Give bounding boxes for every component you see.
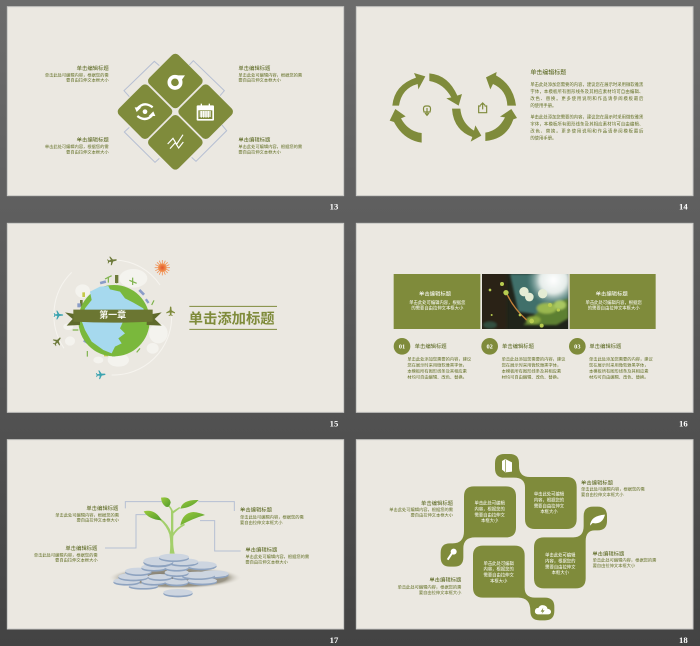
green box right: 单击编辑标题 [596,290,628,298]
item 03: 您在展示时采用微软雅黑字体， [589,361,649,368]
page number 17: 17 [330,635,339,645]
card right with leaf icon: 内容，根据您的 [545,557,576,564]
text: lower left: 单击编辑标题 [77,136,109,144]
text: right [592,550,656,569]
icon: sun [155,260,170,275]
text: lower left: 单击此处可编辑内容，根据您的需 [45,143,109,150]
icon: share [479,103,487,113]
item 02: 02 [487,344,493,351]
icon: plane lower left [51,335,64,348]
card top with book icon: 本框大小 [540,508,558,515]
text: left: 要自由拉伸文本框大小 [410,512,454,519]
icon: sync [135,104,155,119]
text: lower left [45,136,109,155]
text: upper right: 单击编辑标题 [238,64,271,72]
text: upper right [240,506,304,526]
photo: sunlit plants [482,274,568,329]
text: left: 单击此处可编辑内容，根据您的需 [389,506,453,513]
text: upper left: 要自由拉伸文本框大小 [76,517,120,524]
text: lower left: 要自由拉伸文本框大小 [55,557,98,564]
text: upper right: 单击此处可编辑内容，根据您的需 [240,513,304,520]
item 03: 03 [574,344,580,351]
card top with book icon [495,454,577,529]
card right with leaf icon: 需要自由拉伸文 [545,563,576,570]
text block [530,69,644,142]
card left with key icon: 单击此处可编辑 [475,500,505,507]
text: lower left: 要自由拉伸文本框大小 [66,148,109,155]
text: upper right: 单击编辑标题 [581,479,614,487]
text block: 改色、替换。更多使用说明和作品请参阅模板最后 [530,128,644,135]
chapter heading: 单击添加标题 [189,311,275,328]
chapter heading [189,306,277,329]
text: lower right: 单击此处可编辑内容，根据您的需 [238,143,302,150]
text: lower left: 要自由拉伸文本框大小 [419,589,462,596]
text: left: 单击编辑标题 [421,499,454,507]
text: upper right [581,479,645,498]
item 01: 材均可自由编辑、改色、替换。 [407,373,467,380]
card bottom with cloud icon: 内容，根据您的 [484,566,514,573]
icon: download [423,106,431,115]
text: lower left: 单击此处可编辑内容，根据您的需 [398,584,461,591]
text: lower left: 单击此处可编辑内容，根据您的需 [34,551,98,558]
text: upper left: 单击编辑标题 [77,64,109,72]
item 03 [569,338,653,380]
clouds [63,269,168,367]
text: lower left [398,576,462,596]
text: lower right: 要自由拉伸文本框大小 [238,148,282,155]
text: lower right: 要自由拉伸文本框大小 [245,558,289,565]
globe [78,285,150,356]
text: upper left: 单击编辑标题 [86,504,119,512]
text block: 的使用手册。 [530,102,556,109]
panel: slide 15 chapter title [7,223,344,428]
ribbon banner [65,309,162,326]
text: lower right: 单击此处可编辑内容，根据您的需 [245,553,309,560]
item 01: 本模板所有图形线条及其相应素 [407,367,468,374]
icon: plane top [107,256,118,266]
orbit ring [54,260,172,375]
coin shadow [108,566,242,589]
item 01: 单击此处添加您需要的内容，建议 [407,355,472,362]
item 01: 您在展示时采用微软雅黑字体， [407,361,467,368]
card left with key icon: 内容，根据您的 [475,505,505,512]
text: upper left: 单击此处可编辑内容，根据您的需 [45,71,109,78]
text: upper left: 要自由拉伸文本框大小 [66,77,109,84]
text: lower right [238,136,302,155]
item 03: 本模板所有图形线条及其相应素 [589,367,649,374]
text: upper right: 单击此处可编辑内容，根据您的需 [238,71,302,78]
text block: 单击编辑标题 [530,69,566,77]
text block: 字体，本模板所有图形线条及其相应素材均可自由编辑、 [530,88,643,95]
green box right [570,274,656,329]
icon: calendar [197,104,214,121]
page number 18: 18 [679,635,688,645]
text: lower right [245,546,309,565]
green box right: 的需要自由拉伸文本框大小 [588,305,640,312]
text block: 字体，本模板所有图形线条及其相应素材均可自由编辑、 [530,121,643,128]
text: upper right: 要自由拉伸文本框大小 [240,519,283,526]
text: left [389,499,454,519]
card right with leaf icon: 本框大小 [552,569,570,576]
text: upper right [238,64,302,84]
item 02 [481,338,566,380]
card left with key icon: 需要自由拉伸文 [475,512,505,519]
panel: slide 17 plant on coins [7,440,344,645]
green box left: 单击编辑标题 [419,290,452,298]
text: lower right: 单击编辑标题 [245,546,278,554]
card right with leaf icon [534,507,607,588]
item 01: 01 [399,344,405,351]
text block: 单击此处添加您需要的内容，建议您在展示时采用微软雅黑 [530,81,644,88]
card bottom with cloud icon: 本框大小 [490,577,508,584]
item 03: 单击此处添加您需要的内容，建议 [589,355,653,362]
text: upper left [45,64,109,84]
card top with book icon: 需要自由拉伸文 [534,503,565,510]
coin pile [113,554,229,597]
green box right: 单击此处可编辑内容，根据您 [586,299,642,306]
icon: trend lines [168,135,183,149]
card bottom with cloud icon: 需要自由拉伸文 [484,572,514,579]
card left with key icon [441,486,516,567]
item 01 [394,338,472,380]
text block: 改色、替换。更多使用说明和作品请参阅模板最后 [530,95,644,102]
text: upper left: 单击此处可编辑内容，根据您的需 [55,511,119,518]
text: upper right: 单击编辑标题 [240,506,273,514]
green box left: 的需要自由拉伸文本框大小 [411,305,464,312]
item 03: 材均可自由编辑、改色、替换。 [589,373,649,380]
diamond tiles [116,52,235,172]
item 02: 材均可自由编辑、改色、替换。 [502,373,561,380]
card left with key icon: 本框大小 [481,517,499,524]
page number 13: 13 [330,202,339,212]
text: lower left: 单击编辑标题 [65,544,98,552]
item 01: 单击编辑标题 [415,342,447,350]
text: lower right: 单击编辑标题 [238,136,271,144]
card right with leaf icon: 单击此处可编辑 [545,551,576,558]
card top with book icon: 内容，根据您的 [534,496,565,503]
panel: slide 16 three columns with photo [356,223,693,428]
item 02: 本模板所有图形线条及其相应素 [502,367,562,374]
page number 15: 15 [330,418,339,428]
page number 14: 14 [679,202,688,212]
text: upper right: 要自由拉伸文本框大小 [581,491,624,498]
text block: 单击此处添加您需要的内容，建议您在展示时采用微软雅黑 [530,114,644,121]
panel: slide 14 infinity arrows [356,7,693,212]
text: upper right: 单击此处可编辑内容，根据您的需 [581,486,645,493]
item 02: 单击编辑标题 [502,342,535,350]
item 03: 单击编辑标题 [589,342,622,350]
green box left [394,274,480,329]
text: right: 要自由拉伸文本框大小 [593,562,636,569]
text block: 的使用手册。 [530,135,556,142]
icon: plane bottom [96,370,106,379]
connector arrows around the diamonds [124,61,227,162]
page number 16: 16 [679,418,688,428]
text: right: 单击编辑标题 [592,550,625,558]
item 02: 单击此处添加您需要的内容，建议 [502,355,566,362]
panel: slide 18 four connected cards [356,440,693,645]
circular arrows [390,72,517,143]
icon: plane right [166,306,175,316]
icon: refresh [169,75,185,88]
text: lower left: 单击编辑标题 [429,576,462,584]
connector lines [105,502,241,551]
ribbon banner: 第一章 [99,309,126,320]
card top with book icon: 单击此处可编辑 [534,490,565,497]
card bottom with cloud icon [473,546,554,620]
text: right: 单击此处可编辑内容，根据您的需 [593,556,656,563]
plant [144,497,205,554]
text: lower left [34,544,98,564]
item 02: 您在展示时采用微软雅黑字体， [502,361,561,368]
text: upper left [55,504,120,524]
text: upper right: 要自由拉伸文本框大小 [238,77,282,84]
card bottom with cloud icon: 单击此处可编辑 [484,560,514,567]
surrounding trees and buildings [73,275,154,357]
panel: slide 13 diamond diagram [7,7,344,212]
icon: plane left [54,311,63,319]
green box left: 单击此处可编辑内容，根据您 [409,299,466,306]
